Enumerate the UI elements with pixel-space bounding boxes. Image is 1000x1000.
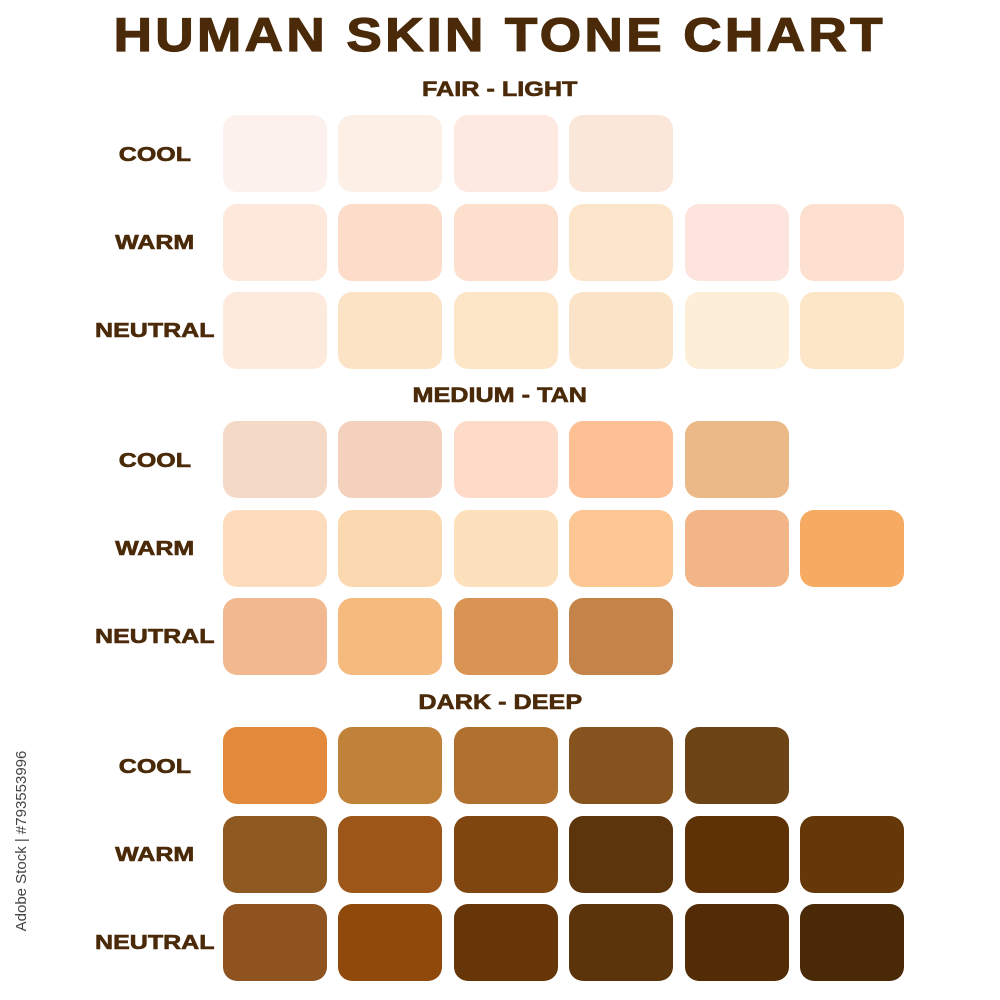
row labels: COOL	[119, 144, 191, 166]
row labels	[95, 144, 215, 954]
heading: fair-light: FAIR - LIGHT	[422, 78, 578, 101]
row labels: WARM	[115, 232, 195, 254]
row labels: COOL	[119, 756, 191, 778]
heading: medium-tan: MEDIUM - TAN	[413, 384, 587, 407]
swatch grid: fair-light	[223, 115, 904, 369]
row labels: NEUTRAL	[95, 320, 215, 342]
row labels: NEUTRAL	[95, 626, 215, 648]
row labels: COOL	[119, 450, 191, 472]
heading: dark-deep: DARK - DEEP	[418, 691, 582, 714]
watermark credit: Adobe Stock | #793553996	[13, 751, 30, 931]
row labels: WARM	[115, 844, 195, 866]
title: HUMAN SKIN TONE CHART	[114, 8, 886, 61]
row labels: NEUTRAL	[95, 932, 215, 954]
row labels: WARM	[115, 538, 195, 560]
swatch grid: medium-tan	[223, 421, 904, 675]
